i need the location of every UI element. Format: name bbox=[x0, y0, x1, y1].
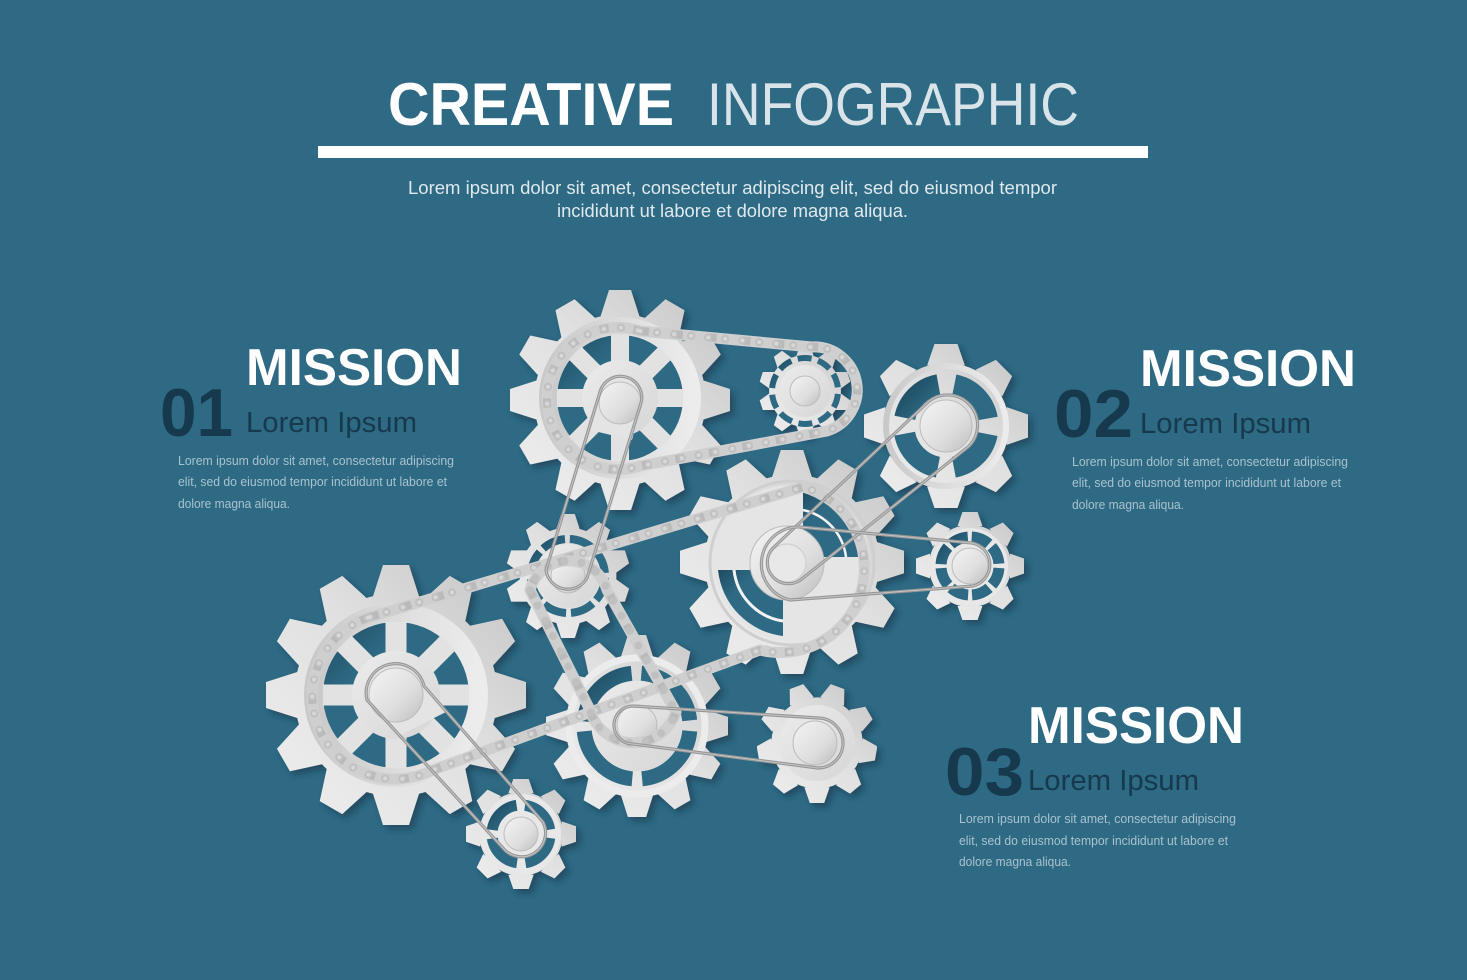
title underline bbox=[318, 146, 1148, 158]
mission 02 block: MISSION bbox=[1140, 340, 1356, 398]
mission 01 block: Lorem Ipsum bbox=[246, 407, 417, 439]
title: INFOGRAPHIC bbox=[707, 71, 1079, 138]
mission 01 block: Lorem ipsum dolor sit amet, consectetur adipiscing bbox=[178, 454, 454, 468]
gear: middle small bbox=[506, 514, 630, 638]
gear: right small bbox=[916, 512, 1024, 620]
gear: top right bbox=[864, 344, 1028, 508]
mission 02 block: Lorem Ipsum bbox=[1140, 408, 1311, 440]
chain: long left to center bbox=[312, 487, 864, 779]
chain: top gears bbox=[547, 327, 857, 470]
title bbox=[388, 71, 1079, 138]
gear: bottom left large bbox=[266, 565, 526, 825]
mission 03 block: dolore magna aliqua. bbox=[959, 855, 1071, 869]
belt: center gear to right small gear bbox=[761, 527, 990, 600]
subtitle: Lorem ipsum dolor sit amet, consectetur adipiscing elit, sed do eiusmod tempor bbox=[408, 177, 1057, 198]
subtitle bbox=[408, 177, 1057, 221]
gear: center large bbox=[680, 450, 904, 674]
gear: top small bbox=[759, 345, 851, 437]
mission 03 block: Lorem Ipsum bbox=[1028, 765, 1199, 797]
mission 03 block: MISSION bbox=[1028, 697, 1244, 755]
mission 01 block: dolore magna aliqua. bbox=[178, 497, 290, 511]
mission 01 block: 01 bbox=[160, 375, 233, 451]
mission 02 block bbox=[1054, 340, 1356, 512]
mission 03 block bbox=[945, 697, 1244, 869]
belt: bottom left gear to tiny gear bbox=[366, 664, 546, 857]
gear: top large bbox=[510, 290, 730, 510]
subtitle: incididunt ut labore et dolore magna aliqua. bbox=[557, 200, 908, 221]
mission 02 block: elit, sed do eiusmod tempor incididunt ut labore et bbox=[1072, 476, 1342, 490]
mission 02 block: 02 bbox=[1054, 376, 1133, 452]
gear machine illustration bbox=[266, 290, 1028, 889]
gear: bottom right bbox=[757, 683, 877, 803]
mission 01 block: MISSION bbox=[246, 339, 462, 397]
belt: top right gear to center gear bbox=[767, 395, 978, 584]
title: CREATIVE bbox=[388, 71, 674, 138]
mission 03 block: elit, sed do eiusmod tempor incididunt ut labore et bbox=[959, 834, 1229, 848]
mission 01 block: elit, sed do eiusmod tempor incididunt ut labore et bbox=[178, 475, 448, 489]
belt: top gear to middle gear bbox=[546, 376, 642, 589]
gear: bottom tiny bbox=[466, 779, 576, 889]
mission 02 block: dolore magna aliqua. bbox=[1072, 498, 1184, 512]
gear: bottom center bbox=[546, 635, 728, 817]
mission 03 block: 03 bbox=[945, 734, 1024, 810]
belt: bottom center gear to bottom right gear bbox=[614, 706, 843, 768]
mission 01 block bbox=[160, 339, 462, 511]
mission 03 block: Lorem ipsum dolor sit amet, consectetur adipiscing bbox=[959, 812, 1236, 826]
mission 02 block: Lorem ipsum dolor sit amet, consectetur adipiscing bbox=[1072, 455, 1348, 469]
chain: middle to bottom center bbox=[530, 561, 676, 743]
